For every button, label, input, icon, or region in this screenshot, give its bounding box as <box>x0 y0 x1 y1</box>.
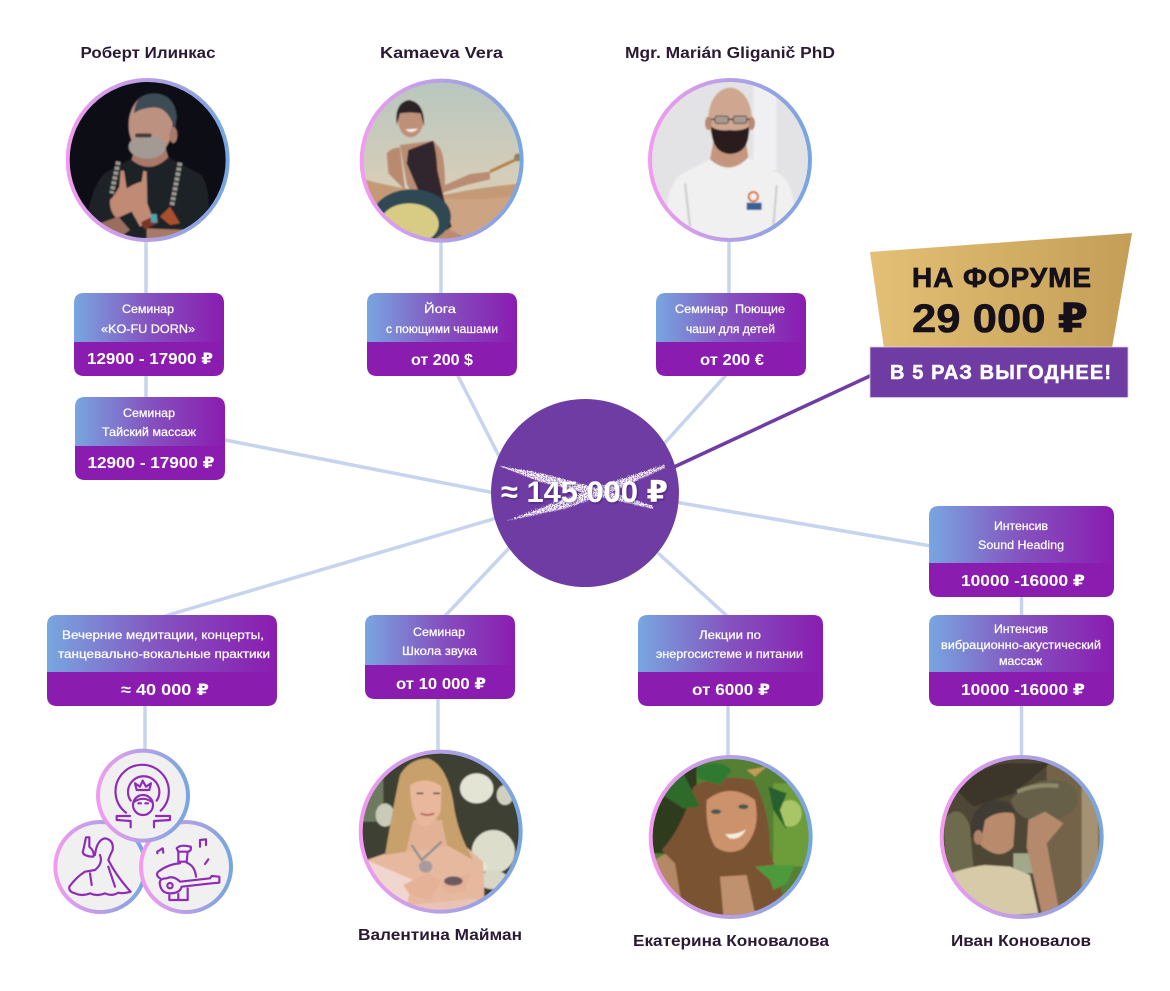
card: вибрационно-акустический массаж: 10000 -16000 ₽ <box>961 682 1085 699</box>
card: Йога: от 200 $ <box>411 352 473 369</box>
card: Лекции <box>638 615 823 706</box>
icon: meditation <box>98 751 188 841</box>
card: вечерние медитации: танцевально-вокальные практики <box>58 647 270 661</box>
heading: на форуме: НА ФОРУМЕ <box>912 262 1091 293</box>
callout: в 5 раз выгоднее: В 5 РАЗ ВЫГОДНЕЕ! <box>890 362 1111 384</box>
card: вечерние медитации: ≈ 40 000 ₽ <box>121 682 209 699</box>
card: Лекции: энергосистеме и питании <box>656 647 803 661</box>
card: Тайский массаж: 12900 - 17900 ₽ <box>88 455 214 472</box>
icon: musician <box>141 822 231 912</box>
photo: Екатерина Коновалова <box>648 755 813 919</box>
card: Тайский массаж: Семинар <box>123 406 175 420</box>
card: Тайский массаж <box>75 397 225 480</box>
photo ring <box>361 752 521 912</box>
card: KO-FU DORN: 12900 - 17900 ₽ <box>87 351 213 368</box>
name: Екатерина Коновалова: Екатерина Коновалова <box>633 933 829 950</box>
card: KO-FU DORN <box>74 293 224 376</box>
card: вибрационно-акустический массаж: массаж <box>999 654 1042 668</box>
photo ring <box>362 81 522 241</box>
name: Marián Gliganič: Mgr. Marián Gliganič PhD <box>625 45 835 62</box>
card: Поющие чаши: от 200 € <box>700 352 764 369</box>
purple banner <box>870 347 1128 398</box>
connector lines <box>145 240 1022 757</box>
card: вибрационно-акустический массаж <box>929 615 1114 706</box>
chalk strike-through <box>499 465 665 521</box>
name: Иван Коновалов: Иван Коновалов <box>951 933 1091 950</box>
card: KO-FU DORN: «KO-FU DORN» <box>101 322 195 336</box>
card: Школа звука: Семинар <box>413 625 465 639</box>
icon: dancer <box>55 822 145 912</box>
card: Sound Heading: 10000 -16000 ₽ <box>961 573 1085 590</box>
card: вибрационно-акустический массаж: Интенсив <box>994 622 1048 636</box>
card: Йога: с поющими чашами <box>386 322 498 336</box>
name: Роберт Илинкас: Роберт Илинкас <box>80 45 216 62</box>
card: Школа звука: Школа звука <box>402 644 477 658</box>
arrow line to forum price <box>674 375 872 467</box>
card: Йога <box>367 293 517 376</box>
photo: Роберт Илинкас <box>66 78 230 242</box>
photo: Иван Коновалов <box>940 755 1104 919</box>
card: Sound Heading: Sound Heading <box>978 538 1064 552</box>
total price: ≈ 145 000 ₽ <box>501 476 668 509</box>
photo: Kamaeva Vera <box>360 78 524 243</box>
central circle: total price <box>491 399 679 587</box>
photo: Marián Gliganič <box>648 78 812 242</box>
card: вечерние медитации <box>47 615 277 706</box>
card: Поющие чаши <box>656 293 806 376</box>
panel: forum price badge <box>870 233 1132 398</box>
photo ring <box>651 757 811 917</box>
card: Школа звука: от 10 000 ₽ <box>396 676 486 693</box>
photo: Валентина Майман <box>358 750 523 914</box>
card: Лекции: Лекции по <box>699 628 761 642</box>
card: вечерние медитации: Вечерние медитации, концерты, <box>62 628 264 642</box>
icons: evening practices <box>55 751 231 912</box>
name: Валентина Майман: Валентина Майман <box>358 927 522 944</box>
gold banner <box>870 233 1132 348</box>
price: 29 000: 29 000 ₽ <box>912 297 1088 341</box>
name: Kamaeva Vera: Kamaeva Vera <box>380 45 503 62</box>
card: Йога: Йога <box>424 301 456 316</box>
card: Sound Heading: Интенсив <box>994 519 1048 533</box>
photo ring <box>650 80 810 240</box>
card: вибрационно-акустический массаж: вибрационно-акустический <box>941 638 1101 652</box>
photo ring <box>68 80 228 240</box>
card: Школа звука <box>365 615 515 699</box>
card: Тайский массаж: Тайский массаж <box>102 425 196 439</box>
card: Sound Heading <box>929 506 1114 597</box>
photo ring <box>942 757 1102 917</box>
card: KO-FU DORN: Семинар <box>122 302 174 316</box>
card: Поющие чаши: чаши для детей <box>686 322 775 336</box>
card: Лекции: от 6000 ₽ <box>692 682 770 699</box>
card: Поющие чаши: Семинар Поющие <box>675 302 785 316</box>
